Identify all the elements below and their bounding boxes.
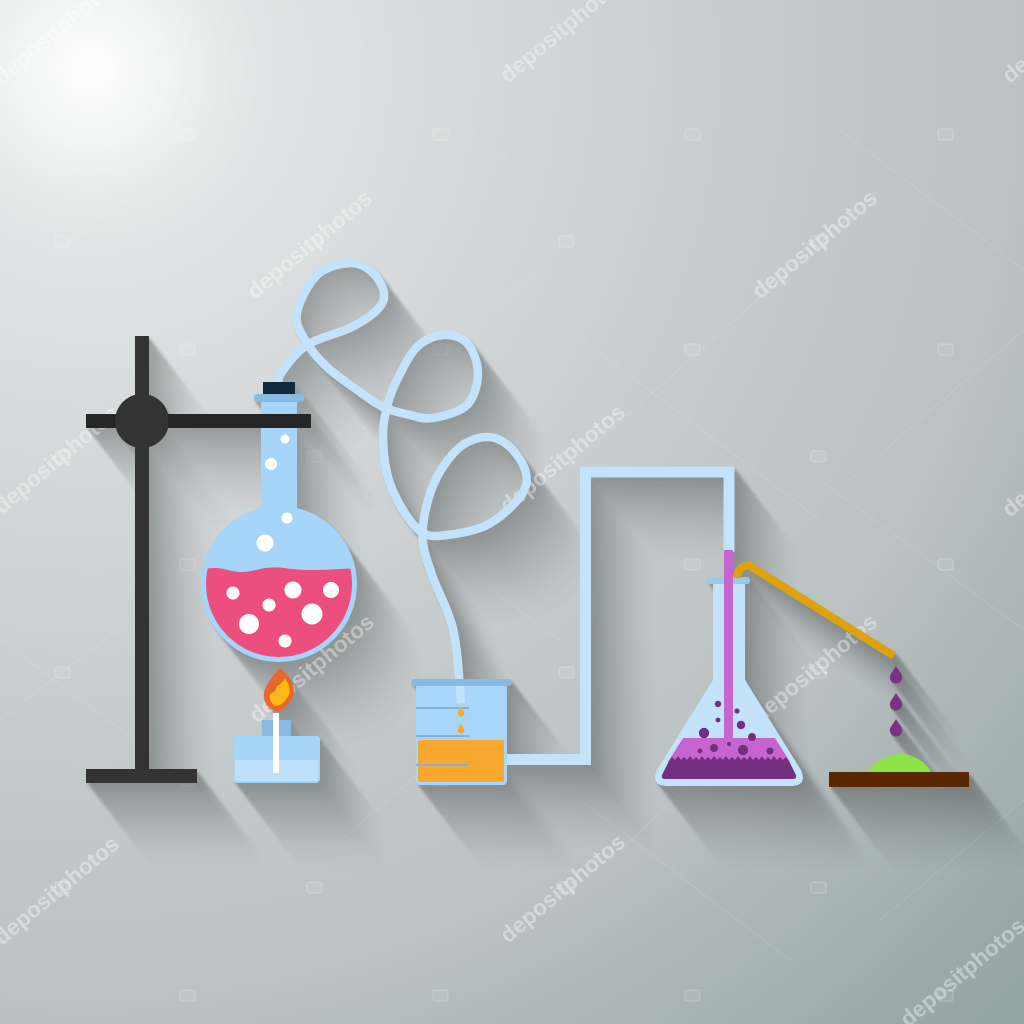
purple tube xyxy=(724,550,733,740)
dark purple liquid xyxy=(662,756,796,779)
icon: coiled delivery tube xyxy=(278,263,527,703)
clamp arm over flask neck xyxy=(168,414,311,428)
pink liquid xyxy=(206,567,352,657)
watermark text: depositphotos xyxy=(495,399,630,518)
icon: conical flask xyxy=(655,550,803,786)
icon: burner xyxy=(233,668,320,783)
watermark camera icons xyxy=(55,129,953,1001)
long cast shadows xyxy=(88,266,1024,871)
light purple liquid xyxy=(668,738,790,762)
watermark text: depositphotos xyxy=(495,829,630,948)
scale lines xyxy=(416,707,469,766)
beaker rim and drops xyxy=(411,679,512,734)
icon: beaker body xyxy=(416,684,507,785)
flame xyxy=(264,668,294,712)
flask stopper and rim xyxy=(254,382,304,402)
watermark text: depositphotos xyxy=(747,185,882,304)
icon: retort stand xyxy=(86,336,311,783)
watermark text: depositphotos xyxy=(244,609,379,728)
icon: gold side tube xyxy=(737,566,894,656)
purple bubbles xyxy=(698,701,774,755)
icon: round-bottom flask xyxy=(200,400,360,662)
icon: purple droplets xyxy=(890,666,902,737)
flask bubbles xyxy=(226,434,339,648)
connecting tube xyxy=(507,472,729,760)
icon: green powder on brown plate xyxy=(829,753,969,787)
watermark text: depositphotos xyxy=(242,185,377,304)
watermark text: depositphotos xyxy=(747,609,882,728)
